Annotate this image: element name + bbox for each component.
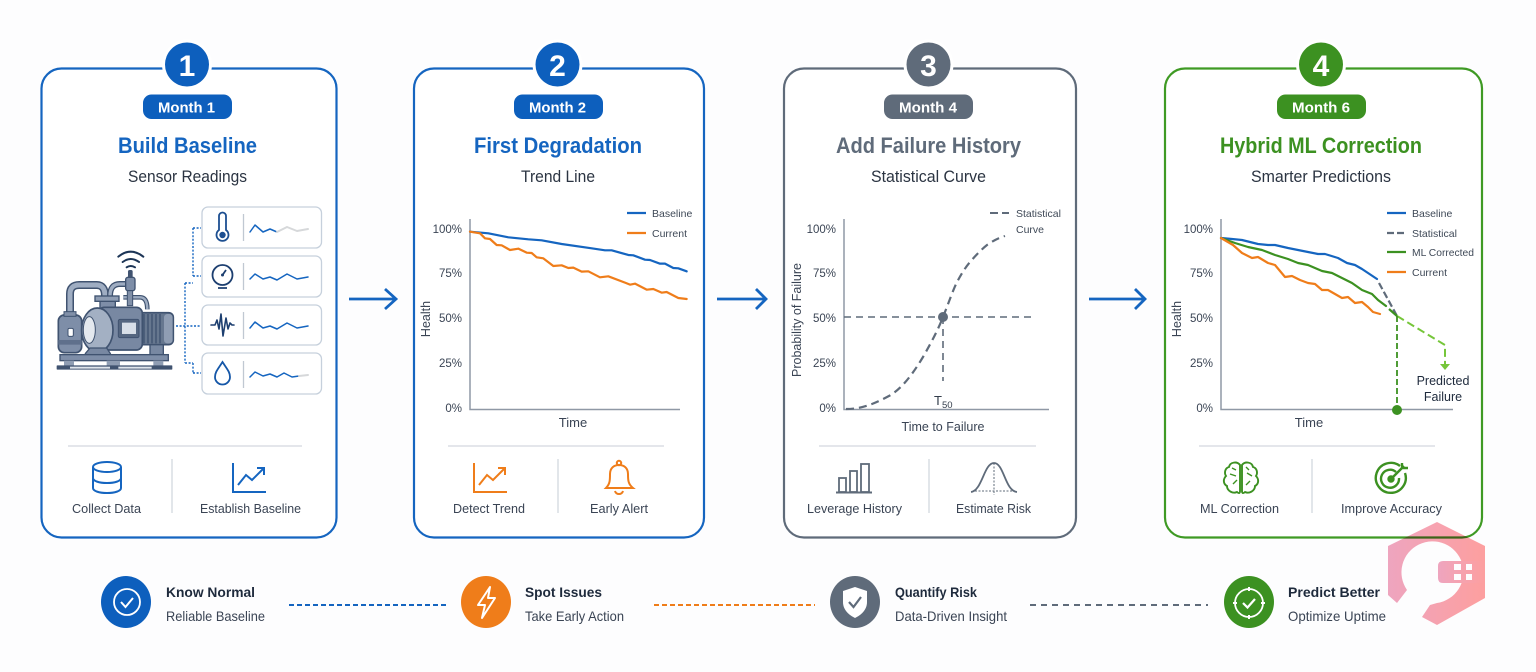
chart: hybrid prediction: ML Corrected (1412, 247, 1474, 259)
chart: statistical S-curve: Time to Failure (902, 420, 984, 434)
number badge 4: 4 (1313, 50, 1330, 83)
chart: hybrid prediction: Predicted (1417, 374, 1469, 388)
label: collect data: Collect Data (72, 501, 142, 516)
number badge 1: 1 (179, 50, 195, 83)
chart: hybrid prediction: 100% (1184, 224, 1213, 236)
sensor row: fluid drop (202, 353, 322, 394)
month pill: Month 2 (529, 100, 586, 116)
heading: First Degradation (474, 133, 642, 158)
takeaway: predict better (1224, 576, 1386, 628)
takeaway: spot issues: Take Early Action (525, 608, 624, 624)
icon: target (1376, 463, 1408, 493)
watermark logo (1388, 522, 1485, 625)
chart: statistical S-curve: 100% (807, 224, 836, 236)
icon: bell (606, 461, 633, 494)
chart: statistical S-curve: 50% (813, 313, 836, 325)
line chart: health trend: Time (559, 415, 587, 430)
chart: statistical S-curve: 75% (813, 268, 836, 280)
chart: hybrid prediction: 25% (1190, 358, 1213, 370)
sensor row: pressure gauge (202, 256, 322, 297)
takeaway: predict better: Predict Better (1288, 584, 1381, 600)
number badge 1 (162, 40, 212, 90)
subheading: Sensor Readings (128, 168, 247, 186)
line chart: health trend (419, 208, 692, 430)
subheading: Statistical Curve (871, 168, 986, 186)
line chart: health trend: Baseline (652, 208, 692, 220)
takeaway: know normal: Know Normal (166, 584, 255, 600)
chart: hybrid prediction: Baseline (1412, 208, 1452, 220)
label: improve accuracy: Improve Accuracy (1341, 501, 1442, 516)
chart: statistical S-curve: Probability of Failure (790, 263, 804, 377)
dotted connectors (176, 228, 201, 373)
chart: statistical S-curve: T (934, 393, 942, 408)
heading: Hybrid ML Correction (1220, 133, 1422, 158)
panel: Month 2 first degradation (414, 40, 704, 538)
panel: Month 6 hybrid ML correction (1165, 40, 1482, 538)
line chart: health trend: 0% (445, 403, 462, 415)
takeaway: quantify risk: Data-Driven Insight (895, 608, 1007, 624)
takeaway: know normal (101, 576, 265, 628)
heading: Build Baseline (118, 133, 257, 158)
icon: baseline chart (233, 463, 266, 492)
sensor row: temperature (202, 207, 322, 248)
takeaway: quantify risk (830, 576, 1007, 628)
icon: database (93, 462, 121, 493)
month pill (514, 94, 603, 119)
chart: statistical S-curve: Statistical (1016, 208, 1061, 220)
line chart: health trend: 75% (439, 268, 462, 280)
line chart: health trend: 100% (433, 224, 462, 236)
arrow 1 to 2 (349, 289, 396, 309)
number badge 4 (1296, 40, 1346, 90)
chart: statistical S-curve: 50 (942, 400, 953, 411)
panel: Month 1 build baseline (42, 40, 336, 538)
takeaway: quantify risk: Quantify Risk (895, 584, 977, 600)
month pill (143, 94, 232, 119)
subheading: Smarter Predictions (1251, 168, 1391, 186)
line chart: health trend: 25% (439, 358, 462, 370)
chart: hybrid prediction: Time (1295, 415, 1323, 430)
arrow 2 to 3 (717, 289, 766, 309)
month pill (884, 94, 973, 119)
chart: hybrid prediction: Failure (1424, 390, 1462, 404)
number badge 2 (532, 40, 582, 90)
month pill: Month 6 (1292, 100, 1350, 116)
chart: hybrid prediction: 75% (1190, 268, 1213, 280)
arrow 3 to 4 (1089, 289, 1145, 309)
chart: statistical S-curve: 25% (813, 358, 836, 370)
line chart: health trend: Current (652, 228, 687, 240)
month pill: Month 1 (158, 100, 215, 116)
month pill: Month 4 (899, 100, 957, 116)
number badge 3 (904, 40, 954, 90)
takeaway: know normal: Reliable Baseline (166, 608, 265, 624)
chart: hybrid prediction: Health (1170, 301, 1184, 337)
sensor row: vibration (202, 305, 322, 345)
chart: hybrid prediction: 0% (1196, 403, 1213, 415)
takeaway: spot issues: Spot Issues (525, 584, 602, 600)
chart: hybrid prediction: Current (1412, 267, 1447, 279)
chart: hybrid prediction: 50% (1190, 313, 1213, 325)
chart: statistical S-curve: Curve (1016, 224, 1044, 236)
label: estimate risk: Estimate Risk (956, 501, 1031, 516)
line chart: health trend: Health (419, 301, 433, 337)
chart: hybrid prediction (1170, 208, 1474, 430)
line chart: health trend: 50% (439, 313, 462, 325)
number badge 2: 2 (549, 50, 566, 83)
panel: Month 4 add failure history (784, 40, 1076, 538)
label: ML correction: ML Correction (1200, 501, 1279, 516)
chart: statistical S-curve: 0% (819, 403, 836, 415)
month pill (1277, 94, 1366, 119)
chart: statistical S-curve (790, 208, 1061, 434)
label: establish baseline: Establish Baseline (200, 501, 301, 516)
icon: detect trend (474, 463, 507, 492)
label: detect trend: Detect Trend (453, 501, 525, 516)
takeaway: predict better: Optimize Uptime (1288, 608, 1386, 624)
label: early alert: Early Alert (590, 501, 648, 516)
takeaway: spot issues (461, 576, 624, 628)
icon: bars history (836, 464, 872, 492)
heading: Add Failure History (836, 133, 1022, 158)
chart: hybrid prediction: Statistical (1412, 228, 1457, 240)
label: leverage history: Leverage History (807, 501, 902, 516)
icon: pump with wifi sensor (57, 252, 173, 370)
icon: brain (1224, 463, 1258, 493)
icon: bell curve (971, 463, 1017, 495)
number badge 3: 3 (920, 50, 937, 83)
subheading: Trend Line (521, 168, 595, 186)
